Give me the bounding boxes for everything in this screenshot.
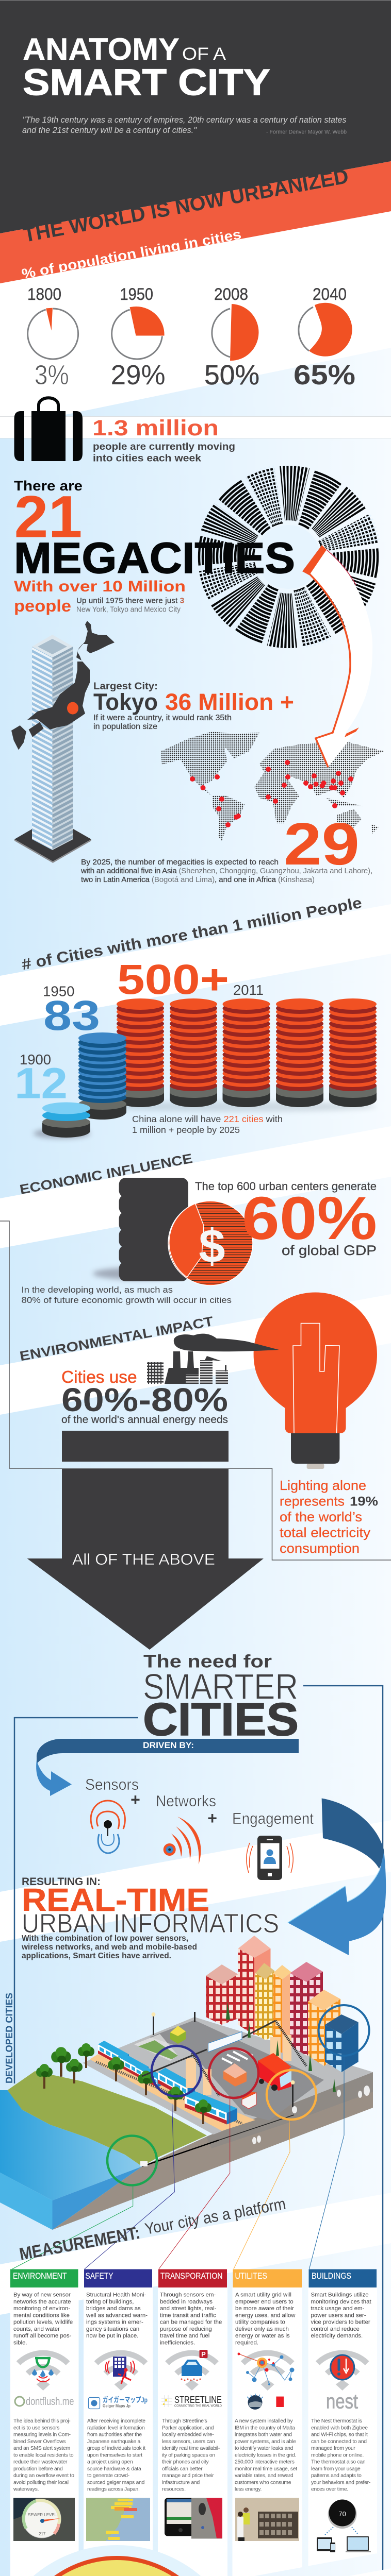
quote: and the 21st century will be a century of cities." [22,125,197,135]
heading: real-time urban informatics: With the combination of low power sensors, [22,1934,188,1943]
icon: tokyo tower [14,635,91,863]
image: smart meters [235,2498,299,2541]
stat: cities use 60-80 percent of energy: 60%-80% [61,1381,228,1418]
chart: 60 percent pie with dollar [168,1201,253,1285]
project text: learn from your usage [311,2466,361,2472]
sensors [85,1775,139,1853]
networks [156,1792,216,1865]
icon: utility grid network [237,2352,294,2391]
column: environment [10,2269,78,2576]
title: ANATOMY [23,32,180,66]
note: lighting electricity [280,1478,378,1556]
icon: water sensor [19,2353,68,2391]
header: SAFETY [86,2271,113,2281]
project text: waterways. [13,2487,39,2493]
image: parking app [165,2498,222,2539]
trees [36,2043,211,2124]
sensor rings and leader lines [12,2005,369,2269]
project text: The idea behind this proj- [13,2418,70,2424]
description: gency situations can [86,2326,139,2332]
project text: and Wi-Fi chips, so that it [311,2432,368,2438]
frame lines: developed cities [14,1686,383,2576]
stat: 29 megacities by 2025: two in Latin America (Bogotá and Lima), and one in Africa (Kinshasa) [81,875,315,884]
description: mental conditions like [13,2312,70,2318]
project text: managed from your [311,2446,355,2451]
economic influence graphic [22,1178,377,1305]
description: energy uses, and allow [235,2312,296,2318]
stat: 1.3 million: people are currently moving [93,442,235,452]
tower wheel graphic [199,468,378,646]
arrow: all of the above [27,1431,264,1650]
project text: a project using open [87,2460,133,2465]
description: counts, and water [13,2326,60,2332]
pie 2040 [294,285,355,391]
stack column 1900: 1900 [20,1052,51,1067]
heading: real-time urban informatics [21,1876,279,1960]
backdrop circle behind developing cities [0,2545,246,2576]
description: bridges and dams as [86,2306,141,2312]
arrow: wheel to map [302,545,372,767]
quote: - Former Denver Mayor W. Webb [266,129,347,135]
heading: measurement: Your city as a platform [143,2194,287,2238]
frame line: environmental impact [0,1221,391,1560]
project text: ect is to use sensors [13,2425,59,2431]
heading: economic influence: ECONOMIC INFLUENCE [19,1150,193,1197]
orange banner [0,161,391,283]
quote [22,115,347,135]
icon: parking car [167,2350,217,2391]
project text: can be connected to and [311,2439,367,2445]
project text: monitor real time usage, set [235,2466,297,2472]
largest city text: in population size [93,722,157,731]
icon: suitcase [14,398,83,461]
icon: plus: + [207,1809,217,1827]
engagement: Engagement [232,1809,314,1827]
stat: 1.3 million: 1.3 million [92,416,219,440]
heading: measurement: MEASUREMENT: [18,2223,142,2264]
stat: 29 megacities by 2025: By 2025, the number of megacities is expected to reach [81,858,279,867]
note: china cities: 1 million + people by 2025 [132,1125,240,1135]
stat: 60 percent of global gdp [195,1180,377,1258]
description: time transit and traffic [160,2312,216,2318]
blue tower sensor building [325,2014,359,2072]
icon: coin stack [119,1178,188,1281]
megacities heading: 21 [14,484,83,550]
heading: real-time urban informatics: RESULTING IN: [22,1876,101,1888]
largest city text: 36 Million + [165,689,294,715]
heading: the need for smarter cities: The need for [143,1651,272,1671]
ribbon arrow: driven by [36,1739,299,1796]
heading: real-time urban informatics: URBAN INFORMATICS [22,1909,279,1939]
ribbon arrow: driven by: DRIVEN BY: [143,1740,194,1750]
project text: 250,000 interactive meters [235,2460,295,2465]
stack column 2011: 500+ [117,956,229,1003]
description: Smart Buildings utilize [311,2292,369,2298]
description: and street lights, real- [160,2306,217,2312]
project text: group of individuals took it [87,2446,145,2451]
project text: your behaviors and prefer- [311,2480,370,2485]
project text: reduce their wastewater [13,2460,68,2465]
icon: thermostat alert [318,2353,367,2391]
largest city text [93,681,294,731]
description: required. [235,2340,258,2346]
description: toring of buildings, [86,2299,134,2305]
engagement [232,1809,314,1880]
icon: tokyo marker [67,702,78,715]
megacities heading: Up until 1975 there were just 3 [76,597,184,605]
pie 2040: 65% [294,360,355,391]
description: now be put in place. [86,2333,138,2339]
pie 2008 [204,285,259,391]
pie 2008: 50% [204,360,259,391]
stat: 29 megacities by 2025 [80,810,372,884]
project text: resources. [162,2487,186,2493]
trains and track [90,2041,255,2131]
description: monitoring devices that [311,2299,371,2305]
project text: less sensors, users can [162,2439,215,2445]
arrow: all of the above: All OF THE ABOVE [72,1550,215,1568]
image: radiation map [86,2498,150,2541]
header [10,2269,78,2287]
image: sewer gauge [13,2498,75,2541]
header [233,2269,302,2287]
image: developing city photo [54,2556,179,2576]
column: safety [84,2269,153,2576]
stat: cities use 60-80 percent of energy [61,1351,228,1426]
description: track usage and em- [311,2306,365,2312]
stat: 1.3 million [92,416,235,464]
column: utilities [232,2269,302,2576]
project text: to enable local residents to [13,2452,74,2458]
stat: 60 percent of global gdp: of global GDP [282,1243,377,1258]
project text: variable rates, and reward [235,2473,294,2479]
project text: bined Sewer Overflows [13,2439,66,2445]
stat: 1.3 million: into cities each week [93,453,201,464]
header: UTILITES [235,2271,267,2281]
project text: Japanese earthquake a [87,2439,141,2445]
header: TRANSPORATION [160,2271,223,2281]
megacities heading: people [14,597,71,615]
stat: 29 megacities by 2025: 29 [284,810,360,877]
world map with megacity dots [161,732,384,841]
banner subheading: % of population living in cities [21,226,242,282]
megacities heading: New York, Tokyo and Mexico City [76,605,181,614]
pie 1800: 1800 [27,285,61,303]
buildings [206,1936,340,2066]
header: ENVIRONMENT [13,2271,67,2281]
description: A smart utility grid will [235,2292,291,2298]
label: developed cities: DEVELOPED CITIES [4,1993,14,2083]
banner heading: THE WORLD IS NOW URBANIZED [22,165,350,247]
heading: cities with more than 1 million: # of Cities with more than 1 million People [20,894,363,973]
logo: streetline: STREETLINE [174,2395,222,2405]
project text: After receiving incomplete [87,2418,145,2424]
column: buildings [308,2269,377,2566]
road details and vehicles [134,2002,370,2166]
image: nest thermostat [317,2500,371,2552]
stack column 1950 [43,983,126,1120]
megacities heading: With over 10 Million [14,578,186,595]
project text: mobile phone or online. [311,2452,364,2458]
project text: Parker application, and [162,2425,214,2431]
description: By way of new sensor [13,2292,71,2298]
megacities heading: MEGACITIES [14,534,295,582]
heading: real-time urban informatics: REAL-TIME [22,1883,209,1918]
description: purpose of reducing [160,2326,212,2332]
largest city text: Largest City: [93,681,158,692]
description: empower end users to [235,2299,294,2305]
header [308,2269,377,2287]
project text: The Nest thermostat is [311,2418,362,2424]
logo: dontflush.me: dontflush.me [26,2396,74,2408]
note: lighting electricity: 19% [350,1495,378,1509]
description: sible. [13,2340,27,2346]
note: lighting electricity: of the world’s [280,1509,362,1524]
description: power users and ser- [311,2312,366,2318]
description: energy or water as is [235,2333,290,2339]
project text: The thermostat also can [311,2460,366,2465]
logo: geiger maps jp [89,2396,148,2409]
project text: locally embedded wire- [162,2432,214,2438]
description: inefficiencies. [160,2340,195,2346]
pie 1950: 29% [111,360,166,391]
megacities heading: There are [14,478,83,494]
heading: the need for smarter cities: SMARTER [143,1667,298,1707]
description: control and reduce [311,2326,360,2332]
megacities heading [14,478,295,615]
description: vice providers to better [311,2319,370,2326]
description: Through sensors em- [160,2292,216,2298]
project text: ences over time. [311,2487,348,2493]
icon: smartphone [247,1836,293,1880]
project text: infastructure and [162,2480,200,2485]
header: BUILDINGS [312,2271,351,2281]
note: lighting electricity: total electricity [280,1525,370,1540]
stack column 2011 [108,956,377,1112]
description: travel time and fuel [160,2333,209,2339]
description: well as advanced warn- [86,2312,148,2318]
networks: Networks [156,1792,216,1810]
project text: officials can better [162,2466,203,2472]
header [158,2269,227,2287]
logo: ibm malta [247,2394,284,2410]
stat: cities use 60-80 percent of energy: Cities use [61,1367,137,1386]
logo: streetline [161,2395,222,2408]
project text: from authorities after the [87,2432,142,2438]
project text: less energy. [235,2487,262,2493]
project text: to identify water leaks and [235,2446,294,2451]
image: sewer gauge: 217 [39,2532,46,2536]
title: SMART CITY [23,62,270,103]
project text: sourced geiger maps and [87,2480,145,2485]
drivers: sensors, networks, engagement [85,1775,314,1880]
project text: customers who consume [235,2480,291,2485]
description: ings systems in emer- [86,2319,143,2326]
project text: electricity losses in the grid. [235,2452,296,2458]
project text: measuring levels in Com- [13,2432,71,2438]
pie 1950 [111,285,166,391]
pie 1800 [27,285,78,391]
note: developing world growth: 80% of future economic growth will occur in cities [22,1295,232,1305]
note: lighting electricity: consumption [280,1540,360,1556]
project text: integrates both water and [235,2432,292,2438]
heading: the need for smarter cities: CITIES [143,1694,299,1745]
description: utility companies to [235,2319,285,2326]
water [0,2090,142,2230]
project text: enabled with both Zigbee [311,2425,368,2431]
project text: during an overflow event to [13,2473,74,2479]
quote: "The 19th century was a century of empires, 20th century was a century of nation states [23,115,347,125]
note: china cities: China alone will have 221 cities with [132,1114,283,1124]
pie charts: urban population share [27,285,355,391]
heading: real-time urban informatics: applications, Smart Cities have arrived. [22,1952,171,1960]
heading: real-time urban informatics: wireless networks, and web and mobile-based [21,1943,197,1952]
pie 2008: 2008 [214,285,248,303]
icon: network signal [164,1817,201,1865]
curved arrow: to real-time informatics [288,1798,386,1955]
project text: power systems, and is able [235,2439,296,2445]
description: be more aware of their [235,2306,294,2312]
project text: Through Streetline's [162,2418,207,2424]
logo: geiger maps jp: Geiger Maps Jp [103,2403,131,2409]
logo: nest: nest [326,2390,358,2413]
pie 1950: 1950 [120,285,153,303]
heading: environmental impact: ENVIRONMENTAL IMPACT [19,1313,215,1364]
project text: A new system installed by [235,2418,293,2424]
sensors: Sensors [85,1775,139,1793]
largest city text: Tokyo [93,689,158,715]
description: can be managed for the [160,2319,222,2326]
project text: production before and [13,2466,63,2472]
description: deliver only as much [235,2326,289,2332]
stat: 29 megacities by 2025: with an additional five in Asia (Shenzhen, Chongqing, Guangzhou, Jakarta and Lahore), [80,867,372,875]
heading: measurement [18,2194,287,2264]
description: bedded in roadways [160,2299,213,2305]
note: developing world growth [22,1285,232,1305]
project text: manage and price their [162,2473,214,2479]
image: sewer gauge: SEWER LEVEL [28,2512,57,2517]
description: pollution levels, wildlife [13,2319,73,2326]
note: china cities [132,1114,283,1135]
description: monitoring of environ- [13,2306,70,2312]
largest city text: If it were a country, it would rank 35th [93,714,232,722]
stat: 60 percent of global gdp: The top 600 urban centers generate [195,1180,377,1193]
image: nest thermostat: 70 [338,2510,346,2518]
logo: dontflush.me [15,2396,74,2408]
note: lighting electricity: represents [280,1494,345,1509]
project text: identify real time availabil- [162,2446,220,2451]
icon: light bulb with smoke [174,1292,377,1469]
stack column 1900 [14,1052,90,1139]
stack column 1900: 12 [14,1059,68,1108]
project text: radiation level information [87,2425,145,2431]
header panel [0,0,391,283]
icon: factory skyline [147,1351,228,1384]
pie 1800: 3% [35,360,69,391]
project text: to generate crowd- [87,2473,129,2479]
pie 2040: 2040 [313,285,347,303]
note: lighting electricity: Lighting alone [280,1478,366,1493]
chart: 60 percent pie with dollar: $ [199,1220,225,1273]
project text: upon themselves to start [87,2452,142,2458]
description: Structural Health Moni- [86,2292,146,2298]
project text: their phones and city [162,2460,209,2465]
icon: sensor [91,1801,125,1853]
project text: and an SMS alert system [13,2446,70,2451]
note: developing world growth: In the developing world, as much as [22,1285,173,1295]
description: networks the accurate [13,2299,71,2305]
project text: readings across Japan. [87,2487,140,2493]
heading: the need for smarter cities [143,1651,299,1745]
column: transportation [158,2269,227,2576]
illustration: isometric smart city [0,1936,373,2269]
stat: 60 percent of global gdp: 60% [242,1184,377,1252]
project text: IBM in the country of Malta [235,2425,295,2431]
title [23,32,270,103]
icon: plus: + [131,1790,140,1809]
stack column 1950: 1950 [43,983,74,999]
icon: parking car: P [201,2350,206,2358]
project text: source hardware & data [87,2466,141,2472]
title: OF A [182,44,226,64]
logo: streetline: CONNECTING THE REAL WORLD [174,2405,222,2408]
description: electricity demands. [311,2333,363,2339]
icon: japan map [11,621,115,750]
stat: cities use 60-80 percent of energy: of the world's annual energy needs [61,1414,228,1426]
project text: patterns and adapts to [311,2473,362,2479]
header [84,2269,152,2287]
project text: ity of parking spaces on [162,2452,215,2458]
description: runoff all become pos- [13,2333,72,2339]
stack column 1950: 83 [43,992,100,1039]
stack column 2011: 2011 [233,982,264,998]
chart: stacks of million-people cities [14,956,377,1139]
logo: geiger maps jp: ガイガーマップJp [103,2396,148,2404]
icon: building alarm [96,2353,145,2391]
project text: avoid polluting their local [13,2480,69,2485]
ground slab [7,2017,373,2230]
